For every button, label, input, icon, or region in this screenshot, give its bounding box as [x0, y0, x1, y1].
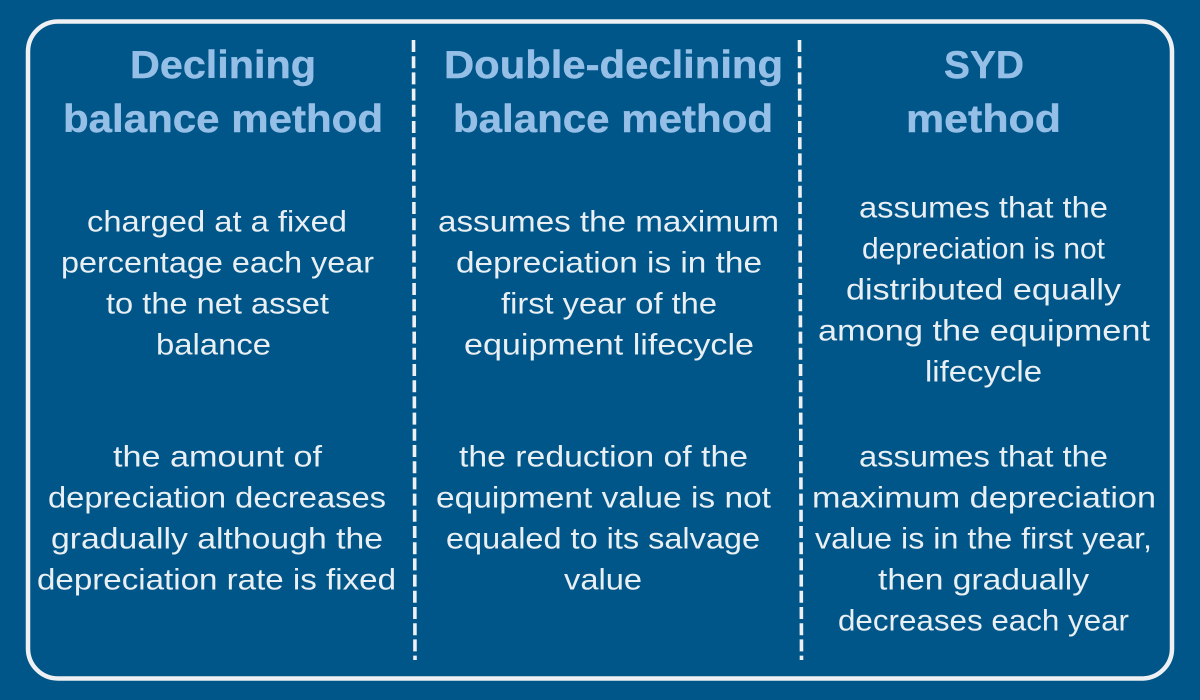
heading: SYD method: [906, 44, 1061, 141]
text block: fixed percentage: balance: [156, 328, 271, 362]
text block: maximum then decreasing: assumes that the: [859, 440, 1108, 474]
heading: declining balance method: [63, 44, 383, 141]
text block: unequal distribution: [818, 192, 1151, 388]
text block: gradual decrease: the amount of: [113, 440, 323, 474]
text block: fixed percentage: to the net asset: [106, 288, 330, 320]
text block: maximum then decreasing: value is in the first year,: [815, 522, 1152, 556]
text block: gradual decrease: gradually although the: [51, 522, 383, 556]
column: SYD method: [812, 44, 1156, 638]
text block: gradual decrease: depreciation rate is fixed: [37, 564, 396, 596]
text block: reduction versus salvage value: the reduction of the: [459, 440, 748, 474]
text block: maximum then decreasing: decreases each year: [838, 604, 1129, 638]
heading: declining balance method: balance method: [63, 98, 383, 141]
text block: maximum depreciation in first year: first year of the: [501, 288, 717, 320]
text block: unequal distribution: depreciation is not: [862, 232, 1106, 266]
text block: maximum depreciation in first year: depreciation is in the: [456, 246, 762, 280]
text block: maximum depreciation in first year: assumes the maximum: [438, 206, 779, 238]
text block: gradual decrease: [37, 440, 396, 596]
text block: maximum then decreasing: then gradually: [878, 564, 1089, 596]
text block: maximum depreciation in first year: equipment lifecycle: [464, 328, 754, 362]
heading: double-declining balance method: balance method: [453, 98, 773, 141]
heading: SYD method: method: [906, 98, 1061, 141]
heading: SYD method: SYD: [944, 44, 1024, 87]
text block: maximum depreciation in first year: [438, 206, 779, 362]
text block: reduction versus salvage value: equaled to its salvage: [446, 522, 760, 556]
text block: reduction versus salvage value: value: [564, 564, 642, 596]
text block: maximum then decreasing: [812, 440, 1156, 638]
text block: unequal distribution: lifecycle: [925, 356, 1042, 388]
text block: reduction versus salvage value: [436, 440, 772, 596]
heading: double-declining balance method: [444, 44, 783, 141]
text block: fixed percentage: charged at a fixed: [87, 206, 347, 238]
text block: unequal distribution: assumes that the: [859, 192, 1108, 224]
text block: reduction versus salvage value: equipment value is not: [436, 482, 772, 514]
column: double-declining balance method: [436, 44, 783, 596]
text block: fixed percentage: percentage each year: [61, 246, 374, 280]
text block: unequal distribution: among the equipment: [818, 314, 1151, 348]
text block: maximum then decreasing: maximum depreciation: [812, 482, 1156, 514]
column: declining balance method: [37, 44, 396, 596]
heading: declining balance method: Declining: [130, 44, 316, 87]
heading: double-declining balance method: Double-declining: [444, 44, 783, 87]
text block: gradual decrease: depreciation decreases: [48, 482, 386, 514]
text block: fixed percentage: [61, 206, 374, 362]
text block: unequal distribution: distributed equally: [846, 274, 1121, 306]
